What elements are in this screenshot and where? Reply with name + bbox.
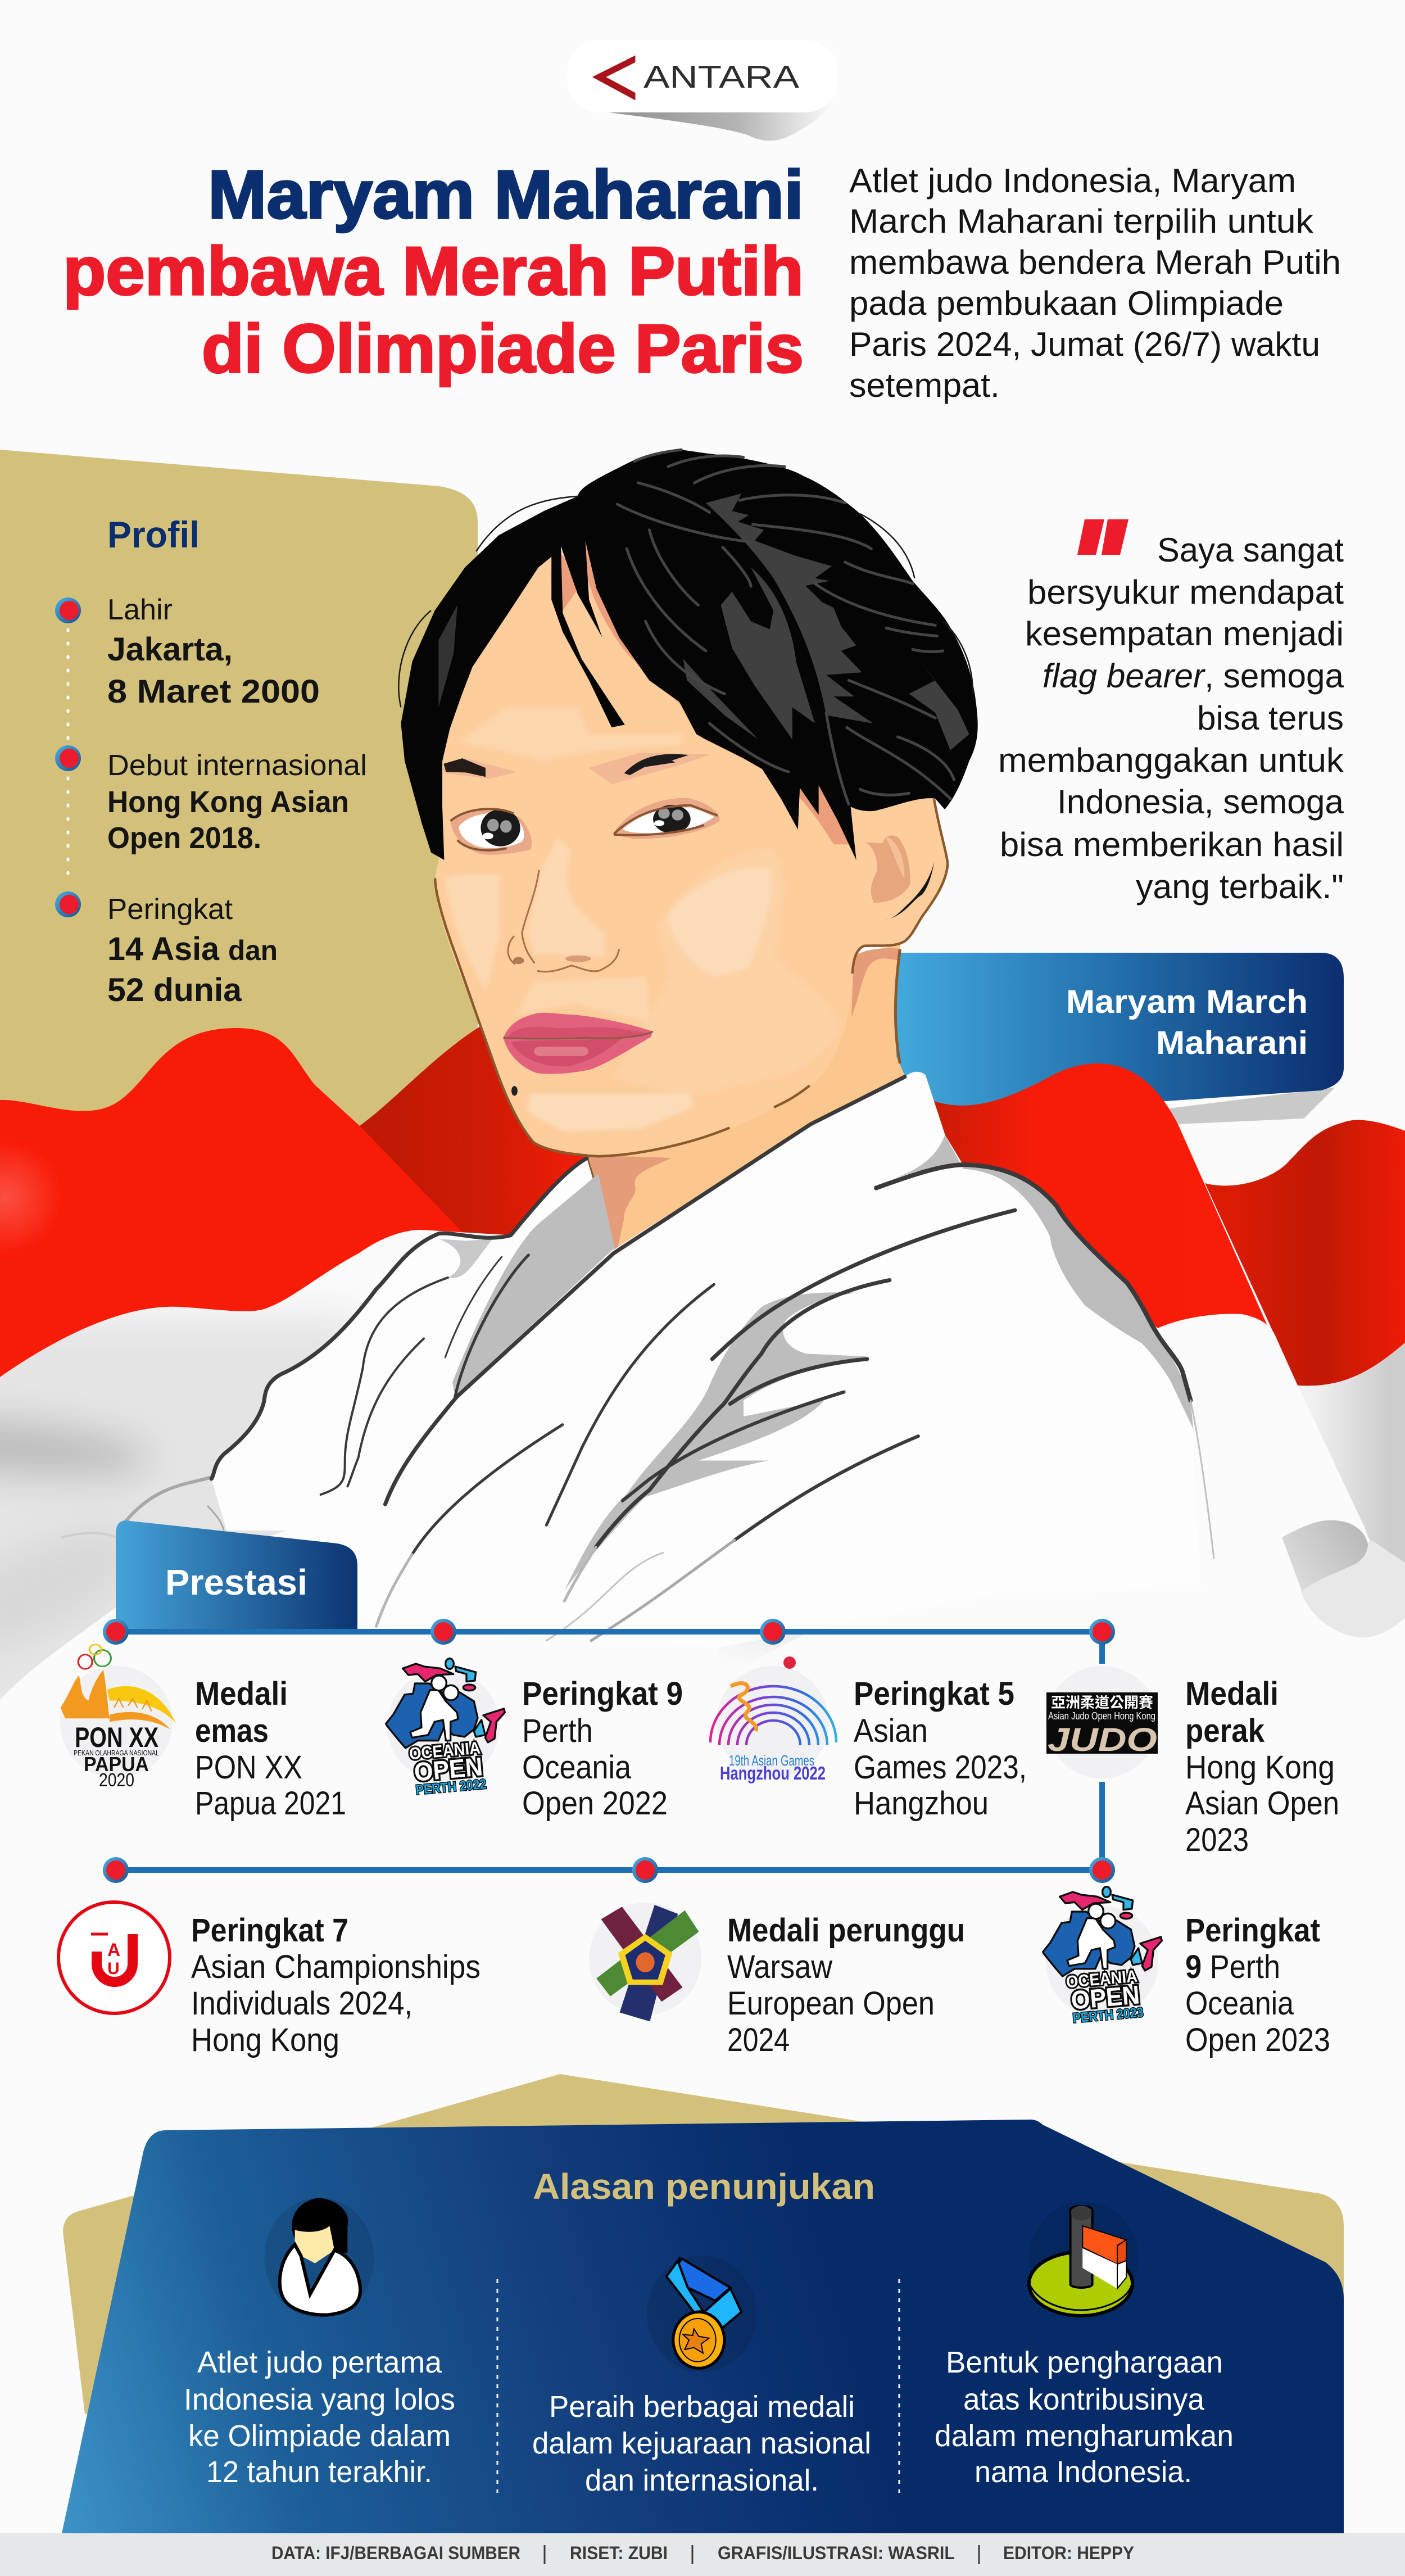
- icon: Oceania Open Perth 2022 logo: OPEN: [413, 1751, 484, 1787]
- reason 1: [184, 2346, 455, 2489]
- lips: [503, 1013, 653, 1074]
- intro text: setempat.: [849, 366, 1000, 404]
- profile: ranking: [107, 893, 278, 1008]
- reason 2: Peraih berbagai medali: [549, 2390, 855, 2424]
- hair mass: [401, 450, 978, 860]
- reason 3: atas kontribusinya: [963, 2383, 1205, 2416]
- profile: birth: [107, 594, 320, 710]
- profile: debut: Debut internasional: [107, 749, 367, 782]
- achievement: Perth 2022: Peringkat 9: [522, 1676, 683, 1712]
- achievement: Asian Championships: Peringkat 7: [191, 1912, 348, 1949]
- name box: [877, 953, 1344, 1124]
- profile: debut: [107, 749, 367, 855]
- footer: EDITOR: HEPPY: [1003, 2543, 1134, 2563]
- timeline: [60, 1619, 1158, 2018]
- intro text: March Maharani terpilih untuk: [849, 202, 1314, 240]
- reason 2: dan internasional.: [585, 2464, 819, 2497]
- achievement: Asian Championships: Hong Kong: [191, 2022, 339, 2058]
- achievement: Warsaw: Medali perunggu: [727, 1912, 965, 1949]
- icon: Oceania Open Perth 2022 logo: [386, 1659, 505, 1798]
- achievement: Perth 2022: Oceania: [522, 1749, 632, 1786]
- quote text: Indonesia, semoga: [1057, 783, 1344, 821]
- footer: GRAFIS/ILUSTRASI: WASRIL: [718, 2543, 955, 2563]
- icon: PON XX logo: PON XX: [75, 1722, 158, 1753]
- profile: ranking: Peringkat: [107, 893, 233, 926]
- intro text: membawa bendera Merah Putih: [849, 243, 1341, 281]
- icon: Warsaw European Open logo: [596, 1905, 699, 2021]
- mole: [511, 1086, 518, 1096]
- title: di Olimpiade Paris: [202, 310, 804, 387]
- achievement: Hangzhou: Hangzhou: [854, 1785, 989, 1822]
- reason 2: [532, 2390, 871, 2497]
- achievement: Hong Kong: Hong Kong: [1185, 1749, 1335, 1786]
- achievement: Hong Kong: Medali: [1185, 1676, 1279, 1712]
- profile: birth: Jakarta,: [107, 631, 233, 668]
- icon: Oceania Open Perth 2023 logo: [1043, 1887, 1162, 2026]
- achievement: Perth 2023: Oceania: [1185, 1985, 1294, 2022]
- reason 3: Bentuk penghargaan: [946, 2346, 1223, 2379]
- dividers: [497, 2279, 899, 2493]
- chin outline: [435, 799, 948, 1156]
- achievement: Asian Championships: Asian Championships: [191, 1949, 481, 1985]
- flag: red band: [0, 1027, 1405, 1405]
- reason 2: dalam kejuaraan nasional: [532, 2426, 871, 2460]
- ear: [864, 835, 934, 921]
- profile: debut: Hong Kong Asian: [107, 785, 349, 819]
- achievement: PON XX: Medali: [195, 1676, 288, 1712]
- icon: PON XX logo: PEKAN OLAHRAGA NASIONAL: [74, 1749, 159, 1757]
- achievement: Perth 2023: 9 Perth: [1185, 1949, 1280, 1985]
- icon: Asian Judo Open logo: JUDO: [1048, 1722, 1157, 1758]
- reason 1: Indonesia yang lolos: [184, 2383, 455, 2416]
- achievement: Perth 2023: [1185, 1912, 1330, 2058]
- reason 1: ke Olimpiade dalam: [188, 2419, 451, 2453]
- flag fold: [1282, 1520, 1368, 1592]
- panel: gold backing: [63, 2074, 1344, 2414]
- quote text: Saya sangat: [1157, 531, 1344, 569]
- heading: Profil: Profil: [107, 514, 200, 555]
- achievement: Hong Kong: Asian Open: [1185, 1785, 1339, 1822]
- profile: ranking: 14 Asia dan: [107, 931, 278, 967]
- right eye: [612, 798, 720, 839]
- intro text: Atlet judo Indonesia, Maryam: [849, 162, 1296, 200]
- achievement: Warsaw: European Open: [727, 1985, 935, 2022]
- achievement: Warsaw: 2024: [727, 2022, 790, 2058]
- dotted connector: [66, 630, 70, 885]
- profile: ranking: 52 dunia: [107, 972, 242, 1008]
- reason 1: 12 tahun terakhir.: [206, 2455, 432, 2489]
- achievement: Hangzhou: Games 2023,: [854, 1749, 1027, 1786]
- achievement: Perth 2023: Peringkat: [1185, 1912, 1320, 1949]
- panel: alasan penunjukan: [62, 2120, 1344, 2533]
- name label: Maryam March: [1066, 984, 1308, 1020]
- intro text: pada pembukaan Olimpiade: [849, 284, 1284, 322]
- profile: birth: 8 Maret 2000: [107, 673, 320, 710]
- achievement: Hangzhou: Asian: [854, 1713, 928, 1749]
- title: Maryam Maharani: [208, 156, 804, 233]
- cheek highlights: [445, 707, 839, 1132]
- hair strands: [617, 450, 954, 804]
- achievement: Asian Championships: Individuals 2024,: [191, 1985, 413, 2022]
- title: [63, 156, 804, 387]
- footer: RISET: ZUBI: [570, 2543, 668, 2563]
- footer: DATA: IFJ/BERBAGAI SUMBER: [271, 2543, 520, 2563]
- achievement: PON XX: emas: [195, 1713, 269, 1749]
- icon: PON XX logo: PAPUA: [84, 1753, 149, 1776]
- icon: Oceania Open Perth 2023 logo: OPEN: [1070, 1980, 1141, 2015]
- flag: white band: [0, 1180, 1405, 1720]
- panel: profil background: [0, 450, 478, 1180]
- icon: flag on base: [1029, 2202, 1139, 2317]
- quote text: [998, 531, 1344, 906]
- kimono: [211, 1072, 1214, 1647]
- icon: Oceania Open Perth 2023 logo: OCEANIA: [1066, 1967, 1138, 1991]
- achievement: Hong Kong: [1185, 1676, 1339, 1858]
- reason 3: [935, 2346, 1234, 2489]
- title: pembawa Merah Putih: [63, 233, 804, 309]
- sleeve shading lines: [62, 1477, 224, 1537]
- icon: Hangzhou 2022 logo: Hangzhou 2022: [720, 1763, 826, 1783]
- icon: Asian Judo Open logo: Asian Judo Open Hong Kong: [1048, 1710, 1155, 1722]
- achievement: Warsaw: Warsaw: [727, 1949, 833, 1985]
- icon: Hangzhou 2022 logo: [710, 1656, 836, 1783]
- icon: Hangzhou 2022 logo: 19th Asian Games: [729, 1752, 814, 1769]
- panel: profil content: [55, 514, 367, 1008]
- logo: ANTARA: ANTARA: [643, 59, 799, 95]
- achievement: Warsaw: [727, 1912, 965, 2058]
- quote text: bersyukur mendapat: [1027, 573, 1344, 611]
- name label: [1066, 984, 1308, 1061]
- markers: [55, 597, 81, 917]
- achievement: PON XX: Papua 2021: [195, 1785, 346, 1822]
- icon: Oceania Open Perth 2022 logo: PERTH 2022: [415, 1777, 487, 1798]
- icon: medal: [647, 2256, 756, 2372]
- icon: Asian Judo Open logo: 亞洲柔道公開賽: [1051, 1694, 1153, 1711]
- icon: Asian Judo Open logo: [1046, 1692, 1158, 1758]
- profile: debut: Open 2018.: [107, 821, 261, 855]
- icon: Oceania Open Perth 2022 logo: OCEANIA: [409, 1739, 481, 1763]
- reason 3: dalam mengharumkan: [935, 2419, 1234, 2453]
- neck: [587, 944, 907, 1253]
- icon: Judo Union of Asia logo: A: [107, 1940, 120, 1960]
- face: [435, 542, 948, 1156]
- quote text: yang terbaik.": [1136, 868, 1344, 906]
- eyebrows: [442, 753, 711, 784]
- icon: Judo Union of Asia logo: [58, 1902, 170, 2013]
- reason 3: nama Indonesia.: [975, 2455, 1192, 2489]
- stray hairs: [398, 496, 973, 707]
- icon: Oceania Open Perth 2023 logo: PERTH 2023: [1072, 2005, 1144, 2026]
- reason 1: Atlet judo pertama: [197, 2346, 442, 2379]
- profile: birth: Lahir: [107, 594, 173, 626]
- quote text: membanggakan untuk: [998, 741, 1344, 779]
- quote text: bisa terus: [1197, 699, 1344, 737]
- quote text: bisa memberikan hasil: [1000, 826, 1344, 863]
- footer: [0, 2533, 1405, 2576]
- quote text: kesempatan menjadi: [1025, 615, 1344, 653]
- achievement: Asian Championships: [191, 1912, 481, 2058]
- achievement: Hangzhou: [854, 1676, 1027, 1822]
- hair: [398, 450, 978, 860]
- achievement: Perth 2022: Perth: [522, 1713, 593, 1749]
- prestasi tab: Prestasi: [165, 1562, 307, 1602]
- achievement: Hong Kong: 2023: [1185, 1822, 1249, 1858]
- name label: Maharani: [1156, 1025, 1308, 1061]
- quote mark: [1077, 519, 1128, 555]
- achievement: Hangzhou: Peringkat 5: [854, 1676, 1014, 1712]
- achievement: PON XX: [195, 1676, 346, 1822]
- neck shadow: [851, 948, 901, 1017]
- achievement: Perth 2022: Open 2022: [522, 1785, 668, 1822]
- heading: Alasan penunjukan: [533, 2166, 875, 2207]
- icon: athlete: [264, 2198, 374, 2317]
- icon: PON XX logo: [61, 1645, 176, 1790]
- icon: Judo Union of Asia logo: U: [107, 1959, 120, 1978]
- nose: [508, 870, 619, 972]
- intro text: Paris 2024, Jumat (26/7) waktu: [849, 325, 1320, 363]
- icon: PON XX logo: 2020: [99, 1769, 134, 1790]
- quote text: flag bearer, semoga: [1043, 657, 1344, 695]
- left eye: [451, 809, 532, 855]
- achievement: PON XX: PON XX: [195, 1749, 302, 1786]
- prestasi tab: [116, 1520, 357, 1629]
- logo: ANTARA: [567, 40, 839, 141]
- achievement: Perth 2022: [522, 1676, 683, 1822]
- timeline markers: [103, 1619, 1115, 1883]
- intro text: [849, 162, 1341, 404]
- achievement: Perth 2023: Open 2023: [1185, 2022, 1330, 2058]
- achievement: Hong Kong: perak: [1185, 1713, 1265, 1749]
